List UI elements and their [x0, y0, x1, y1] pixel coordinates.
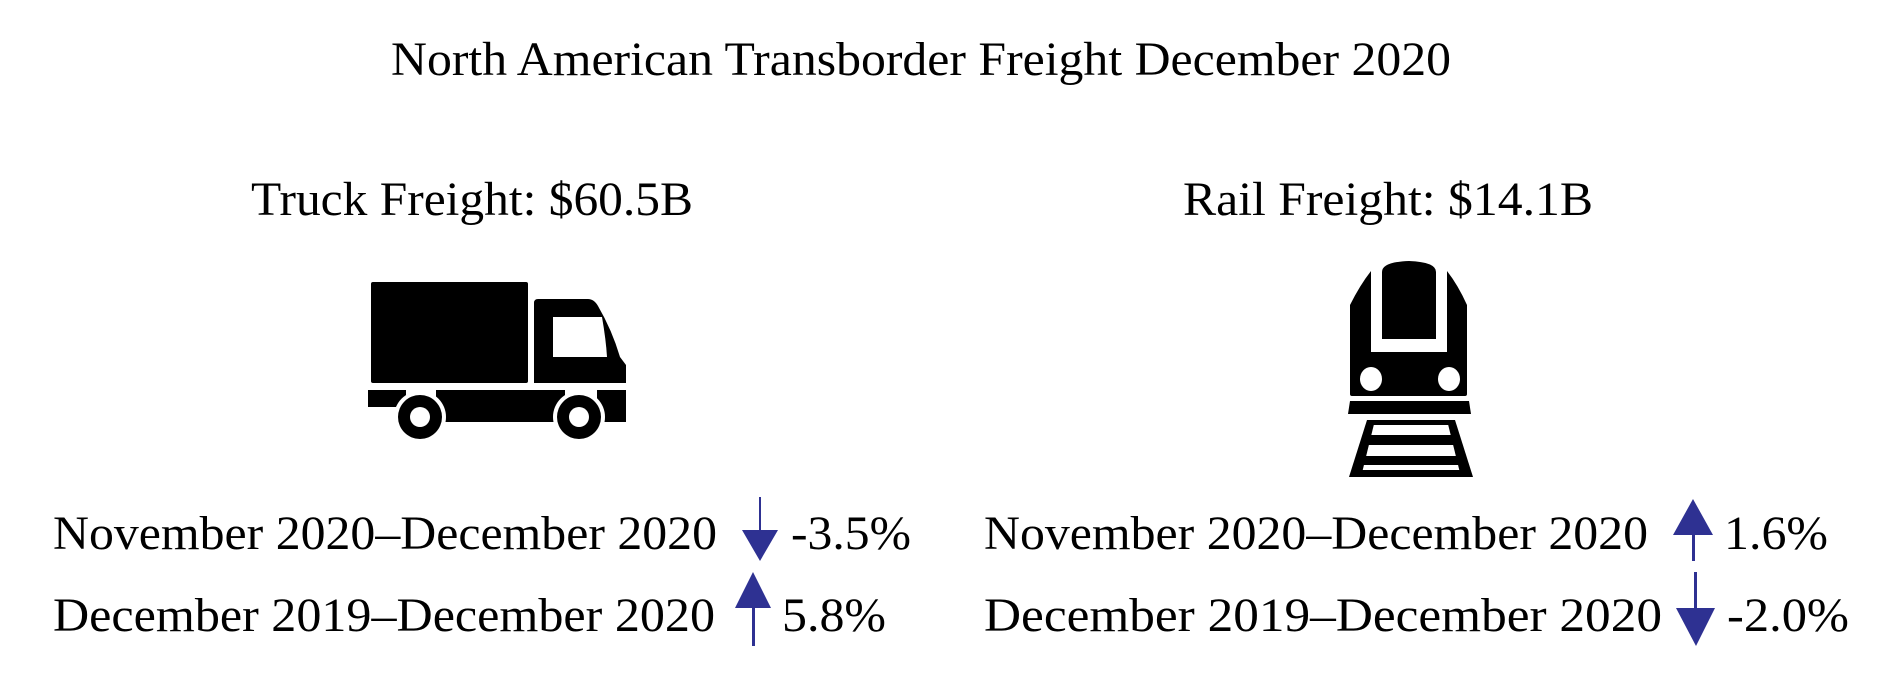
arrow down: [742, 497, 778, 561]
rail row 2: -2.0%: [1727, 589, 1849, 642]
icon: train: [1348, 261, 1473, 477]
arrow up: [1673, 499, 1713, 561]
rail row 2: December 2019–December 2020: [984, 589, 1662, 642]
rail row 2: [984, 572, 1849, 646]
arrow down: [1676, 572, 1715, 646]
truck row 1: November 2020–December 2020: [53, 507, 717, 560]
rail row 1: November 2020–December 2020: [984, 507, 1648, 560]
heading: truck freight: Truck Freight: $60.5B: [251, 173, 693, 226]
rail row 1: 1.6%: [1724, 507, 1828, 560]
truck row 2: [53, 572, 886, 646]
rail row 1: [984, 499, 1828, 561]
truck row 2: December 2019–December 2020: [53, 589, 715, 642]
icon: truck: [368, 282, 626, 443]
heading: rail freight: Rail Freight: $14.1B: [1183, 173, 1593, 226]
truck row 1: -3.5%: [791, 507, 911, 560]
truck row 1: [53, 497, 911, 561]
truck row 2: 5.8%: [782, 589, 886, 642]
arrow up: [735, 572, 771, 646]
title: North American Transborder Freight December 2020: [391, 33, 1451, 86]
